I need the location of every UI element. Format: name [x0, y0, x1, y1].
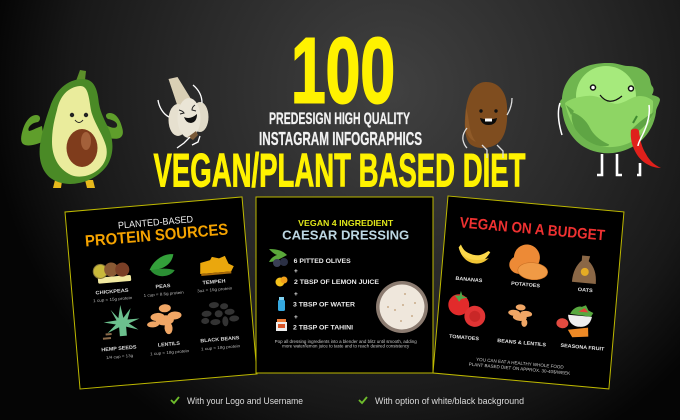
icon: tomatoes [447, 290, 487, 328]
character: garlic [158, 77, 208, 148]
panel heading: protein sources: PROTEIN SOURCES [84, 220, 229, 250]
headline: 100: 100 [291, 18, 395, 122]
icon: beans and lentils [507, 303, 533, 327]
ingredients list: 3 TBSP OF WATER [293, 302, 355, 308]
labels: row one: BANANAS [455, 276, 483, 284]
icon: black beans [200, 300, 240, 328]
labels: tempeh: TEMPEH [202, 278, 226, 286]
subheading: PREDESIGN HIGH QUALITY [269, 109, 410, 128]
icon: olives [269, 249, 288, 267]
icon: lentils [146, 303, 183, 336]
character: avocado [21, 70, 123, 188]
panel: protein sources [65, 197, 257, 389]
labels: black beans [200, 335, 241, 351]
ingredients list: 2 TBSP OF TAHINI [293, 324, 353, 332]
labels: row one [455, 276, 594, 294]
feature: background option: With option of white/black background [375, 396, 524, 406]
labels: tempeh: 3oz = 15g protein [197, 285, 232, 293]
subheading [259, 109, 422, 149]
icon: oats sack [572, 255, 598, 284]
character: cabbage with chili [558, 63, 661, 175]
ingredients list: + [294, 314, 298, 321]
panel heading: caesar dressing [282, 218, 409, 242]
character: potato [463, 82, 512, 158]
panel heading: caesar dressing: VEGAN 4 INGREDIENT [298, 218, 394, 228]
labels: hemp seeds: 1/4 cup = 13g [106, 353, 133, 360]
labels: hemp seeds: HEMP SEEDS [101, 344, 137, 353]
labels: chickpeas [92, 287, 132, 303]
icon: water bottle [278, 297, 285, 311]
icon: peas [148, 254, 175, 277]
labels: peas [143, 282, 184, 298]
labels: lentils: LENTILS [158, 341, 181, 349]
labels: lentils [149, 340, 189, 356]
ingredients list: + [294, 268, 298, 275]
panel heading: protein sources: PLANTED-BASED [118, 214, 194, 232]
labels: chickpeas: 1 cup = 15g protein [93, 295, 132, 303]
panel: vegan on a budget [433, 196, 624, 389]
labels: row one: OATS [577, 287, 594, 294]
instructions: more water/lemon juice to taste and to reach desired consistency [282, 344, 410, 349]
icon: potatoes [508, 243, 550, 281]
panel heading: budget: VEGAN ON A BUDGET [459, 214, 606, 244]
labels: peas: 1 cup = 8.5g protein [143, 290, 184, 298]
footer note: YOU CAN EAT A HEALTHY WHOLE FOOD [476, 357, 565, 370]
panel heading: caesar dressing: CAESAR DRESSING [282, 228, 409, 242]
icon: seasonal fruit [555, 303, 594, 339]
labels: row one: POTATOES [511, 281, 541, 290]
labels: peas: PEAS [155, 283, 171, 290]
labels: tempeh [196, 278, 232, 293]
icon: bowl of dressing [376, 281, 428, 333]
labels: row two [449, 333, 604, 354]
ingredients list: 2 TBSP OF LEMON JUICE [294, 279, 380, 286]
feature: logo and username: With your Logo and Username [187, 396, 303, 406]
instructions: Pop all dressing ingredients into a blender and blitz until smooth, adding [275, 339, 417, 344]
icon: bananas [457, 244, 491, 265]
instructions [275, 339, 417, 349]
ingredients list: + [294, 291, 298, 298]
icon: tempeh [199, 255, 234, 276]
ingredients list [293, 258, 380, 332]
icon: tahini jar [276, 319, 287, 331]
labels: black beans: 1 cup = 18g protein [201, 343, 240, 351]
labels: row two: TOMATOES [449, 334, 480, 342]
labels: lentils: 1 cup = 18g protein [150, 348, 189, 356]
icon: lemon [276, 276, 288, 286]
labels: row two: BEANS & LENTILS [497, 338, 547, 349]
icon: hemp seeds [100, 303, 141, 340]
icon: chickpeas [93, 261, 131, 284]
ingredients list: 6 PITTED OLIVES [294, 258, 351, 265]
labels: hemp seeds [101, 344, 138, 360]
subheading: INSTAGRAM INFOGRAPHICS [259, 129, 422, 149]
labels: row two: SEASONA FRUIT [560, 343, 604, 353]
panel: caesar dressing [256, 197, 433, 373]
footer note: PLANT BASED DIET ON APPROX. 30-40$/WEEK [469, 362, 570, 376]
labels: chickpeas: CHICKPEAS [95, 288, 130, 296]
labels: black beans: BLACK BEANS [200, 335, 240, 344]
